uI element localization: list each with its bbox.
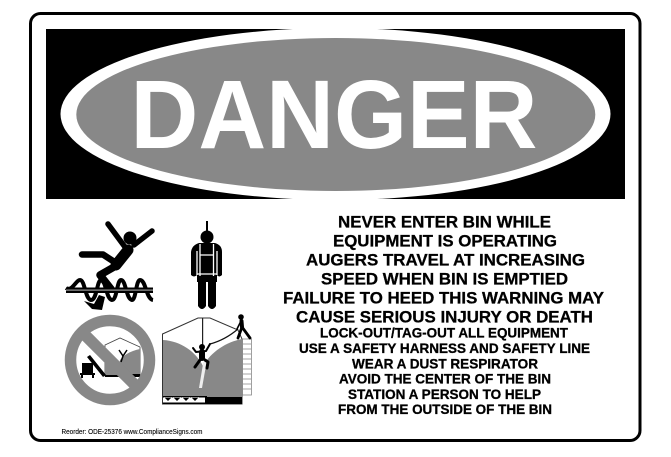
falling figure bbox=[82, 224, 152, 289]
arms and torso bbox=[191, 243, 222, 282]
bin shell bbox=[162, 318, 242, 404]
icon: bin cross-section bbox=[162, 314, 252, 404]
auger shaft bbox=[66, 288, 153, 293]
auger blades bbox=[66, 280, 153, 300]
center line bbox=[202, 318, 203, 346]
safety instructions text: USE A SAFETY HARNESS AND SAFETY LINE bbox=[299, 341, 590, 356]
worker in bin bbox=[193, 344, 210, 368]
heading: DANGER: DANGER bbox=[130, 60, 538, 169]
ladder bbox=[242, 339, 252, 395]
tiny figure bbox=[119, 350, 127, 362]
safety instructions text: AVOID THE CENTER OF THE BIN bbox=[339, 372, 551, 386]
icon: person falling into auger bbox=[66, 224, 153, 310]
auger tunnel screw bbox=[163, 396, 207, 404]
header banner bbox=[46, 28, 625, 200]
primary warning text: SPEED WHEN BIN IS EMPTIED bbox=[321, 270, 568, 288]
harness straps bbox=[197, 244, 217, 276]
prohibition bar bbox=[82, 332, 138, 388]
small bin bbox=[105, 338, 140, 376]
auger base bbox=[105, 374, 140, 377]
icon: safety harness bbox=[191, 221, 222, 309]
primary warning text: FAILURE TO HEED THIS WARNING MAY bbox=[283, 288, 605, 308]
safety line bbox=[206, 221, 208, 231]
primary warning text: NEVER ENTER BIN WHILE bbox=[338, 212, 551, 232]
white ellipse bbox=[60, 28, 610, 200]
black banner background bbox=[46, 29, 625, 199]
legs bbox=[198, 279, 216, 309]
safety rope bbox=[210, 329, 238, 344]
safety instructions text bbox=[299, 326, 590, 417]
primary warning text: EQUIPMENT IS OPERATING bbox=[333, 232, 557, 250]
trapped foot bbox=[84, 295, 105, 310]
prohibition ring bbox=[70, 320, 150, 400]
head bbox=[200, 230, 214, 244]
primary warning text: CAUSE SERIOUS INJURY OR DEATH bbox=[296, 308, 593, 326]
grain bbox=[163, 339, 242, 397]
gray ellipse bbox=[76, 38, 595, 191]
black base bbox=[205, 397, 242, 404]
helper on ladder bbox=[237, 314, 250, 338]
safety instructions text: STATION A PERSON TO HELP bbox=[348, 387, 541, 402]
machine bbox=[80, 355, 106, 378]
reorder footer: Reorder: ODE-25376 www.ComplianceSigns.com bbox=[62, 429, 203, 436]
auger tunnel bbox=[163, 396, 207, 404]
small bin grain bbox=[105, 349, 140, 375]
auger shaft highlight bbox=[66, 290, 153, 291]
safety instructions text: WEAR A DUST RESPIRATOR bbox=[352, 356, 538, 372]
warning text bbox=[283, 212, 605, 417]
primary warning text bbox=[283, 212, 605, 326]
white falling stream bbox=[199, 358, 207, 388]
icon: prohibited entry bbox=[70, 320, 150, 400]
safety instructions text: LOCK-OUT/TAG-OUT ALL EQUIPMENT bbox=[320, 326, 569, 340]
safety instructions text: FROM THE OUTSIDE OF THE BIN bbox=[338, 402, 552, 417]
primary warning text: AUGERS TRAVEL AT INCREASING bbox=[306, 250, 585, 270]
